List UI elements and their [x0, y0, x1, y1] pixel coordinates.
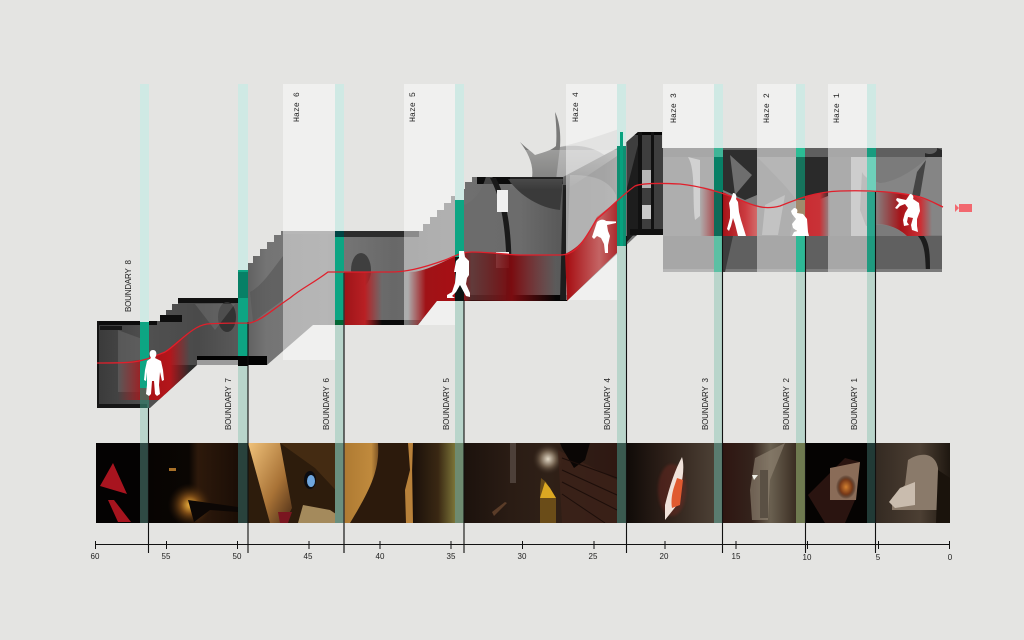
band 5 — [455, 84, 464, 523]
haze 6 panel — [283, 84, 335, 360]
haze panels — [283, 84, 867, 360]
haze 3 panel — [663, 84, 714, 272]
time axis: 60 — [91, 552, 100, 561]
haze 1 panel — [828, 84, 867, 272]
haze 1 label: Haze 1 — [833, 93, 842, 123]
band 3 — [714, 84, 723, 523]
time axis: 20 — [660, 552, 669, 561]
haze 4 panel — [566, 84, 617, 300]
band 2 — [796, 84, 805, 523]
band 8 — [140, 84, 149, 523]
figure: walking man — [447, 251, 470, 298]
boundary 2 label: BOUNDARY 2 — [782, 377, 791, 430]
photo 7: red-white light shape — [627, 443, 714, 523]
vertical boundary lines — [148, 192, 876, 553]
red path line — [97, 183, 943, 363]
haze 5 label: Haze 5 — [409, 92, 418, 122]
photo 6: corridor with lamp — [464, 443, 617, 523]
haze 2 label: Haze 2 — [763, 93, 772, 123]
figure: climbing man — [895, 194, 920, 232]
figure: crouching man — [791, 208, 809, 236]
figure: running man — [727, 193, 746, 236]
boundary 6 label: BOUNDARY 6 — [322, 377, 331, 430]
haze 5 panel — [404, 84, 455, 325]
time axis: 40 — [376, 552, 385, 561]
figure: standing man — [144, 350, 164, 396]
photo 3: tan wall and window — [248, 443, 335, 523]
time axis: 0 — [948, 553, 953, 562]
haze 4 label: Haze 4 — [572, 92, 581, 122]
icon: camera — [955, 204, 972, 212]
time axis — [91, 541, 953, 562]
photo 2: brick glow — [169, 443, 238, 523]
section model: stepped corridor — [97, 130, 943, 410]
photo 9: orange interior — [808, 458, 860, 523]
fade toward top of haze 4 — [510, 150, 630, 190]
time axis: 35 — [447, 552, 456, 561]
boundary bands (teal) — [140, 84, 876, 523]
time axis: 25 — [589, 552, 598, 561]
photo strip — [96, 443, 950, 527]
photo 1: red triangle — [100, 463, 131, 522]
time axis: 10 — [803, 553, 812, 562]
boundary 5 label: BOUNDARY 5 — [442, 377, 451, 430]
labels: boundary — [124, 259, 859, 430]
time axis: 45 — [304, 552, 313, 561]
boundary 7 label: BOUNDARY 7 — [224, 377, 233, 430]
band 7 — [238, 84, 248, 523]
boundary 8 label: BOUNDARY 8 — [124, 259, 133, 312]
band 1 — [867, 84, 876, 523]
photo 10: pale cave — [876, 443, 950, 523]
photo 5: dim arc — [413, 443, 455, 523]
photo 8: pale door recess — [723, 443, 796, 523]
time axis: 15 — [732, 552, 741, 561]
time axis: 50 — [233, 552, 242, 561]
time axis: 30 — [518, 552, 527, 561]
photo 4: amber arc — [344, 443, 413, 523]
boundary 1 label: BOUNDARY 1 — [850, 377, 859, 430]
band 4 — [617, 84, 626, 523]
time axis: 55 — [162, 552, 171, 561]
haze 3 label: Haze 3 — [670, 93, 679, 123]
wisp above section — [520, 112, 626, 190]
time axis: 5 — [876, 553, 881, 562]
dark edges and interior details — [97, 132, 942, 408]
figure: leaping man — [592, 220, 616, 253]
labels: haze — [293, 92, 842, 123]
red light volumes — [118, 186, 932, 400]
right block — [723, 157, 942, 236]
boundary 3 label: BOUNDARY 3 — [701, 377, 710, 430]
band 6 — [335, 84, 344, 523]
haze 2 panel — [757, 84, 796, 272]
haze 6 label: Haze 6 — [293, 92, 302, 122]
boundary 4 label: BOUNDARY 4 — [603, 377, 612, 430]
